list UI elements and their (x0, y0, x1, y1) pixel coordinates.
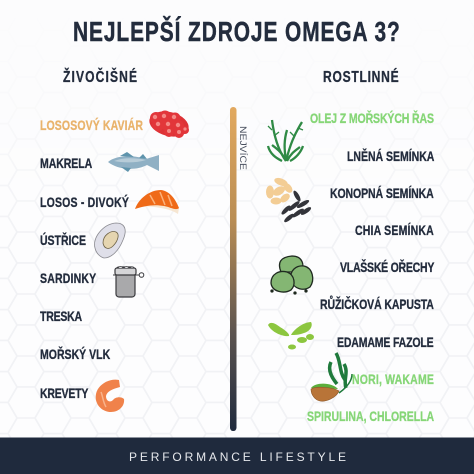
icon: seeds (266, 176, 312, 224)
gradient scale bar (230, 107, 236, 431)
icon: seaweed bowl (311, 353, 352, 401)
panel: animal sources (40, 108, 191, 412)
icon: edamame (268, 322, 314, 350)
icon: sardine can (113, 267, 144, 297)
icon: seaweed plant (268, 120, 303, 161)
label: brussels sprouts: RŮŽIČKOVÁ KAPUSTA (320, 295, 434, 312)
label: spirulina, chlorella: SPIRULINA, CHLORELLA (307, 409, 434, 424)
heading: animal sources: ŽIVOČIŠNÉ (63, 66, 137, 85)
label: nori, wakame: NORI, WAKAME (352, 372, 434, 387)
icon: caviar (147, 108, 191, 140)
label: sardines: SARDINKY (40, 271, 96, 286)
label: algae oil: OLEJ Z MOŘSKÝCH ŘAS (310, 110, 434, 126)
label: edamame beans: EDAMAME FAZOLE (337, 335, 434, 350)
label: chia seeds: CHIA SEMÍNKA (355, 222, 434, 238)
label: walnuts: VLAŠSKÉ OŘECHY (340, 259, 434, 275)
label: flax seeds: LNĚNÁ SEMÍNKA (347, 148, 435, 164)
label: mackerel: MAKRELA (40, 156, 92, 171)
scale label: most: NEJVÍCE (238, 126, 248, 170)
label: oysters: ÚSTŘICE (40, 232, 86, 248)
heading: plant sources: ROSTLINNÉ (323, 68, 399, 85)
label: sea bass: MOŘSKÝ VLK (40, 346, 110, 362)
panel: plant sources (266, 110, 435, 424)
icon: salmon nigiri (135, 190, 179, 214)
icon: brussels sprouts (271, 256, 313, 294)
label: shrimp: KREVETY (40, 386, 88, 401)
label: wild salmon: LOSOS - DIVOKÝ (40, 194, 129, 210)
footer band (0, 438, 474, 474)
icon: shrimp (96, 380, 124, 412)
label: salmon caviar: LOSOSOVÝ KAVIÁR (40, 117, 143, 133)
title: NEJLEPŠÍ ZDROJE OMEGA 3? (73, 16, 400, 48)
icon: mackerel fish (108, 152, 159, 172)
label: hemp seeds: KONOPNÁ SEMÍNKA (330, 185, 434, 201)
footer text: PERFORMANCE LIFESTYLE (129, 450, 346, 464)
label: cod: TRESKA (40, 309, 82, 324)
icon: oyster (95, 223, 125, 258)
